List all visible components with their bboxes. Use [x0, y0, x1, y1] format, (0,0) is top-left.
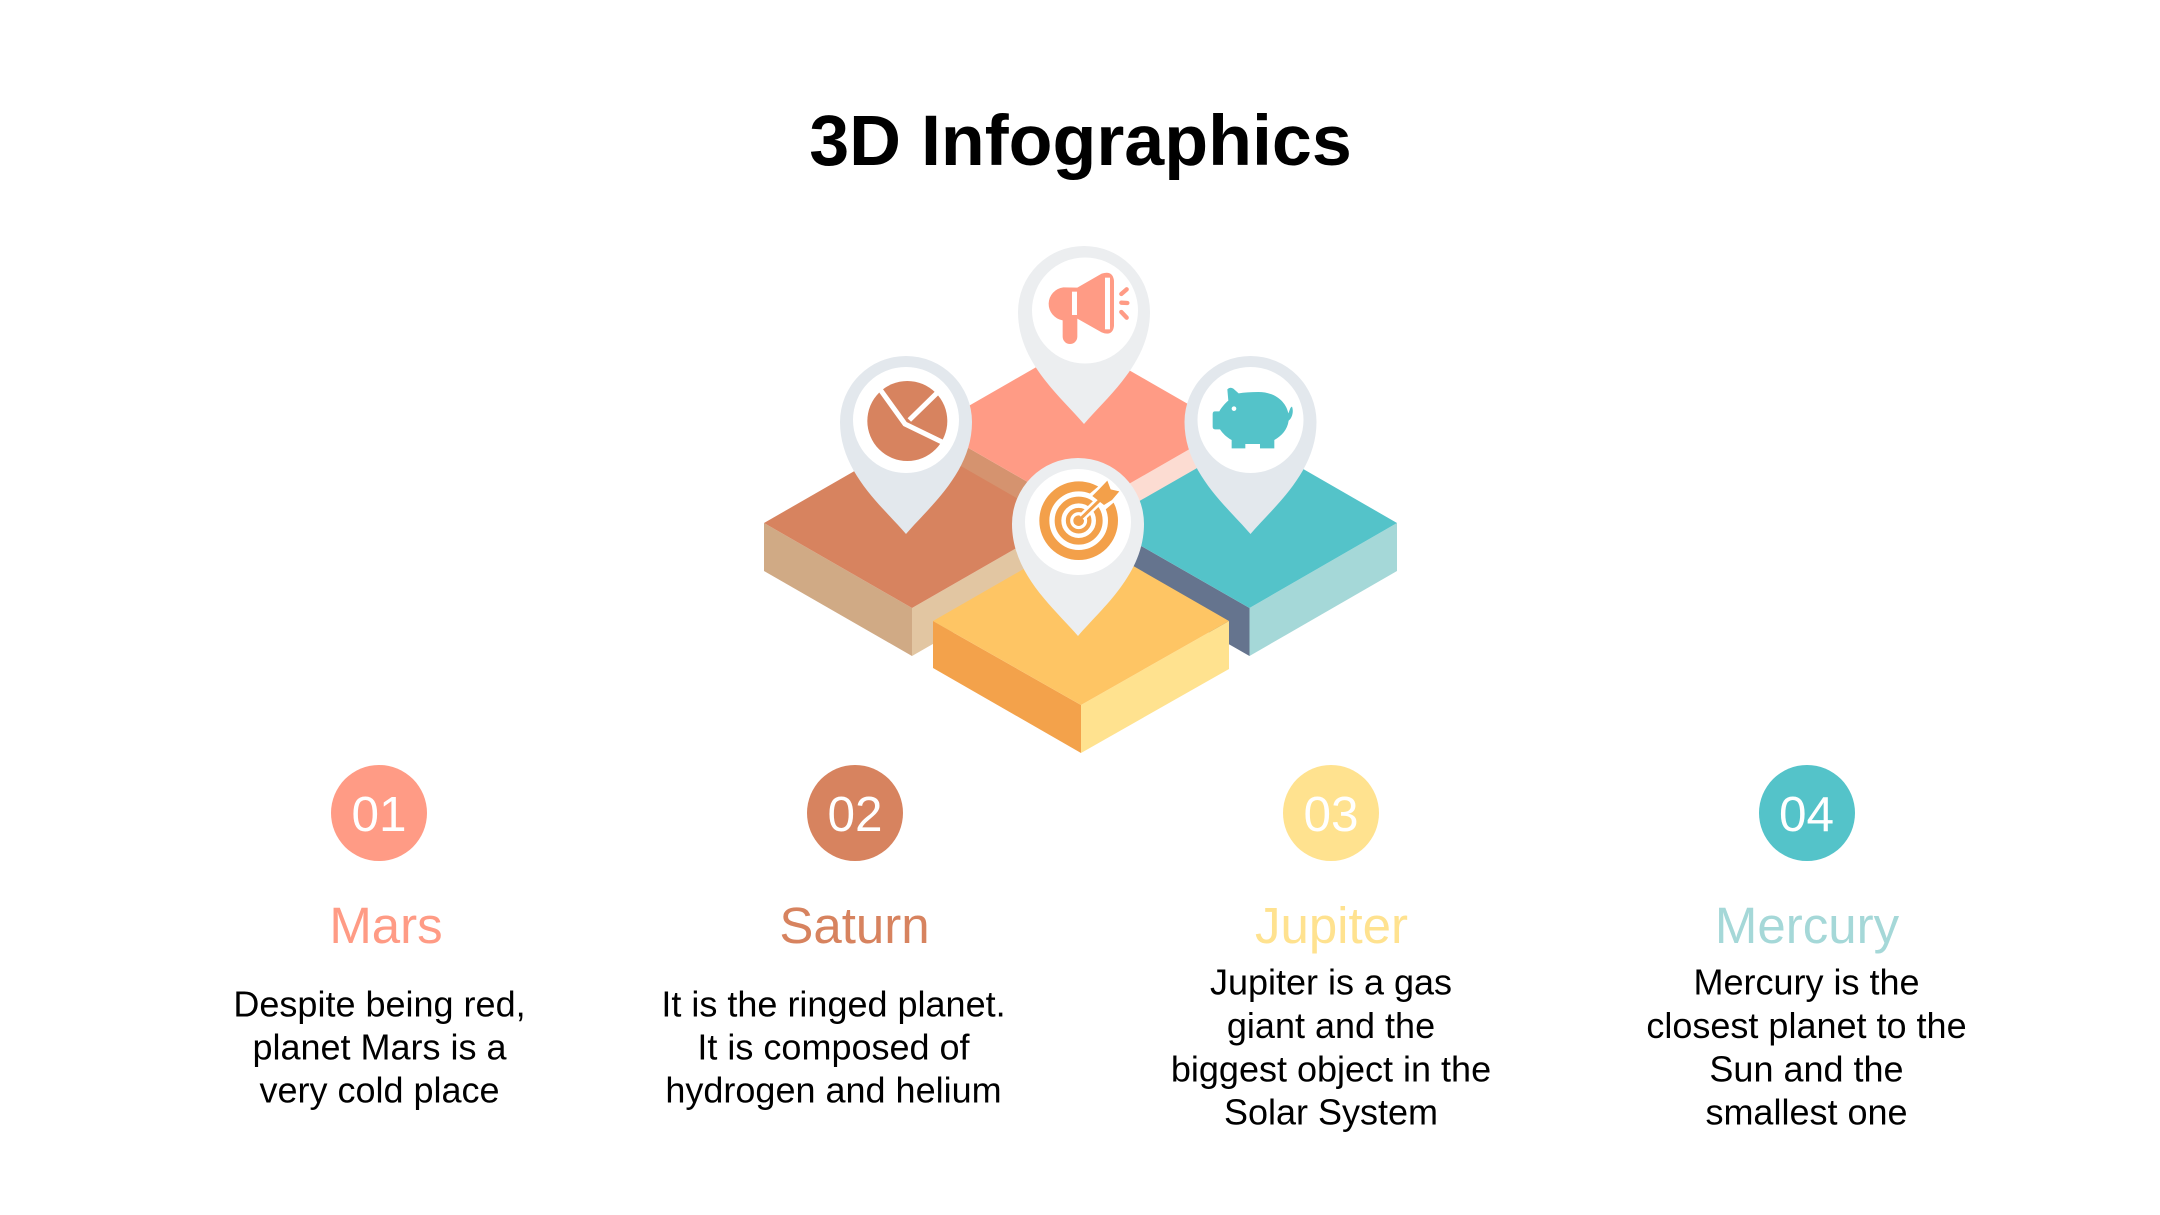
heading: Saturn: Saturn — [779, 897, 930, 954]
badge 02: 02 — [827, 787, 883, 842]
text: Mercury description: smallest one — [1705, 1092, 1908, 1132]
text: Mercury description: Sun and the — [1709, 1048, 1904, 1090]
heading: Mars: Mars — [329, 897, 443, 954]
badge 03 — [1283, 765, 1379, 861]
text: Saturn description: It is the ringed planet. — [661, 984, 1006, 1024]
column: Jupiter — [1171, 765, 1491, 1132]
block: teal — [1101, 438, 1397, 656]
text: Saturn description: It is composed of — [697, 1026, 971, 1068]
text: Mercury description: Mercury is the — [1693, 962, 1920, 1002]
text: Jupiter description: Solar System — [1224, 1092, 1438, 1132]
pin: target — [1012, 458, 1144, 636]
badge 04 — [1759, 765, 1855, 861]
text: Mercury description: closest planet to the — [1646, 1005, 1967, 1046]
text: Saturn description — [661, 984, 1006, 1110]
block: coral — [932, 342, 1228, 560]
text: Mars description: planet Mars is a — [252, 1026, 508, 1068]
title: 3D Infographics — [809, 101, 1352, 181]
text: Jupiter description — [1171, 962, 1491, 1132]
badge 01 — [331, 765, 427, 861]
icon: piggy bank — [1213, 388, 1293, 448]
icon: pie chart — [867, 381, 947, 461]
icon: megaphone — [1049, 273, 1127, 344]
badge 04: 04 — [1779, 787, 1834, 842]
text: Jupiter description: giant and the — [1227, 1005, 1435, 1046]
text: Jupiter description: Jupiter is a gas — [1210, 962, 1452, 1002]
text: Mercury description — [1646, 962, 1967, 1132]
text: Mars description — [233, 984, 526, 1110]
text: Mars description: Despite being red, — [233, 984, 526, 1024]
block: yellow — [933, 536, 1229, 753]
badge 01: 01 — [351, 787, 407, 842]
badge 03: 03 — [1303, 787, 1359, 842]
text: Jupiter description: biggest object in the — [1171, 1048, 1491, 1090]
block: terracotta — [764, 438, 1060, 656]
pin: megaphone — [1018, 246, 1150, 424]
column: Mars — [233, 765, 526, 1110]
pin: piggy bank — [1184, 356, 1316, 534]
pin: pie chart — [840, 356, 972, 534]
icon: target — [1044, 481, 1119, 555]
heading: Jupiter: Jupiter — [1255, 897, 1408, 954]
isometric diagram — [764, 246, 1397, 753]
column: Mercury — [1646, 765, 1967, 1132]
column: Saturn — [661, 765, 1006, 1110]
text: Saturn description: hydrogen and helium — [665, 1070, 1002, 1110]
heading: Mercury: Mercury — [1715, 897, 1900, 954]
badge 02 — [807, 765, 903, 861]
text: Mars description: very cold place — [259, 1070, 500, 1110]
